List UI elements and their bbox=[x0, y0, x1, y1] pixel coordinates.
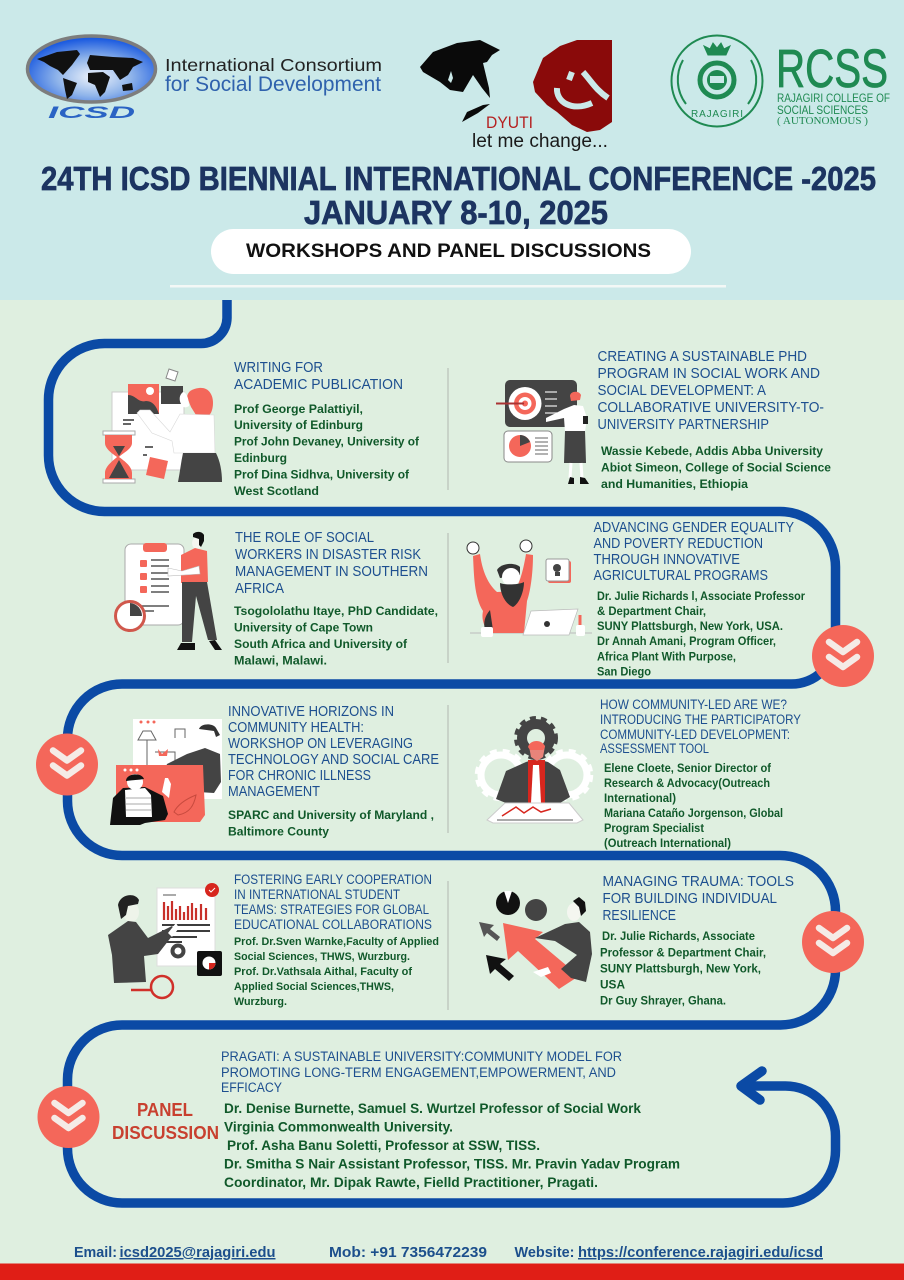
chevron badge 2 bbox=[36, 734, 98, 796]
heading: IN INTERNATIONAL STUDENT bbox=[234, 887, 400, 902]
panel: advancing gender equality bbox=[467, 520, 805, 678]
illustration: woman presenting target bbox=[496, 380, 589, 484]
speakers: Prof. Dr.Vathsala Aithal, Faculty of bbox=[234, 966, 412, 978]
heading: WRITING FOR bbox=[234, 360, 323, 376]
subtitle pill: WORKSHOPS AND PANEL DISCUSSIONS bbox=[246, 241, 651, 262]
Dyuti text: DYUTI bbox=[486, 113, 533, 132]
speakers: Applied Social Sciences,THWS, bbox=[234, 981, 394, 993]
panel: role of social workers in disaster risk bbox=[116, 530, 438, 668]
RCSS name: RAJAGIRI COLLEGE OF bbox=[777, 93, 890, 105]
panel: creating a sustainable PhD program bbox=[496, 349, 831, 491]
speakers bbox=[234, 402, 420, 498]
footer contact line: Website: bbox=[514, 1245, 574, 1261]
panel: panel discussion label: DISCUSSION bbox=[112, 1123, 219, 1143]
consortium name bbox=[165, 55, 382, 96]
tagline: let me change... bbox=[472, 131, 608, 152]
speakers: & Department Chair, bbox=[597, 604, 706, 618]
footer contact line: https://conference.rajagiri.edu/icsd bbox=[578, 1245, 823, 1261]
heading bbox=[235, 530, 428, 597]
heading: AFRICA bbox=[235, 581, 284, 597]
speakers: International) bbox=[604, 791, 676, 805]
speakers: Prof Dina Sidhva, University of bbox=[234, 468, 410, 482]
speakers: Research & Advocacy(Outreach bbox=[604, 776, 770, 790]
logo: ICSD bbox=[28, 36, 156, 122]
speakers bbox=[597, 589, 805, 678]
illustration: woman arranging pictures bbox=[103, 369, 222, 483]
heading: WORKSHOP ON LEVERAGING bbox=[228, 736, 413, 752]
speakers: Dr. Denise Burnette, Samuel S. Wurtzel Professor of Social Work bbox=[224, 1101, 641, 1116]
speakers: SUNY Plattsburgh, New York, bbox=[600, 962, 761, 976]
speakers: Wassie Kebede, Addis Abba University bbox=[601, 444, 823, 458]
illustration: man with chart and magnifier bbox=[108, 883, 222, 998]
heading: TEAMS: STRATEGIES FOR GLOBAL bbox=[234, 902, 429, 917]
panel: innovative horizons in community health bbox=[110, 704, 439, 838]
chevron badge 3 bbox=[802, 911, 864, 973]
heading: TECHNOLOGY AND SOCIAL CARE bbox=[228, 752, 439, 768]
panel: panel discussion label: PANEL bbox=[137, 1100, 193, 1120]
panel: fostering early cooperation bbox=[108, 872, 439, 1008]
chevron badge 1 bbox=[812, 625, 874, 687]
speakers: Tsogololathu Itaye, PhD Candidate, bbox=[234, 604, 438, 618]
speakers bbox=[601, 444, 831, 491]
illustration: man with gears bbox=[476, 718, 592, 823]
heading bbox=[221, 1049, 622, 1095]
speakers: Dr. Julie Richards l, Associate Professor bbox=[597, 589, 805, 603]
heading: AND POVERTY REDUCTION bbox=[594, 536, 763, 552]
heading: COMMUNITY-LED DEVELOPMENT: bbox=[600, 727, 790, 742]
speakers: South Africa and University of bbox=[234, 637, 408, 651]
RCSS name: SOCIAL SCIENCES bbox=[777, 105, 868, 117]
speakers: Dr. Smitha S Nair Assistant Professor, TISS. Mr. Pravin Yadav Program bbox=[224, 1156, 680, 1172]
logo: Dyuti bbox=[420, 40, 612, 152]
speakers: Social Sciences, THWS, Wurzburg. bbox=[234, 951, 410, 963]
heading bbox=[600, 697, 801, 756]
heading bbox=[234, 872, 432, 932]
header band bbox=[0, 0, 904, 300]
speakers: Edinburg bbox=[234, 451, 287, 465]
speakers bbox=[228, 808, 434, 838]
speakers: Prof George Palattiyil, bbox=[234, 402, 363, 416]
speakers: Africa Plant With Purpose, bbox=[597, 650, 736, 664]
speakers: Abiot Simeon, College of Social Science bbox=[601, 460, 831, 474]
heading: WORKERS IN DISASTER RISK bbox=[235, 547, 421, 563]
speakers: Dr. Julie Richards, Associate bbox=[602, 929, 755, 943]
speakers: West Scotland bbox=[234, 484, 319, 498]
heading: ADVANCING GENDER EQUALITY bbox=[594, 520, 794, 536]
heading: MANAGEMENT bbox=[228, 784, 320, 800]
heading: SOCIAL DEVELOPMENT: A bbox=[598, 383, 766, 399]
footer contact line bbox=[74, 1245, 823, 1261]
speakers: Program Specialist bbox=[604, 821, 704, 835]
heading: MANAGEMENT IN SOUTHERN bbox=[235, 564, 428, 580]
speakers: University of Edinburg bbox=[234, 418, 363, 432]
footer contact line: icsd2025@rajagiri.edu bbox=[120, 1245, 276, 1261]
speakers: Wurzburg. bbox=[234, 996, 287, 1008]
heading: FOR BUILDING INDIVIDUAL bbox=[602, 891, 777, 907]
heading: INNOVATIVE HORIZONS IN bbox=[228, 704, 394, 720]
speakers: University of Cape Town bbox=[234, 620, 373, 634]
speakers bbox=[604, 761, 783, 850]
heading: PRAGATI: A SUSTAINABLE UNIVERSITY:COMMUNITY MODEL FOR bbox=[221, 1049, 622, 1064]
panel: how community-led are we bbox=[476, 697, 801, 850]
subtitle pill bbox=[211, 229, 691, 274]
speakers bbox=[234, 604, 438, 668]
heading: MANAGING TRAUMA: TOOLS bbox=[602, 874, 794, 890]
illustration: man with checklist and clock bbox=[116, 532, 222, 650]
heading: THROUGH INNOVATIVE bbox=[594, 552, 740, 568]
chevron badge 4 bbox=[38, 1086, 100, 1148]
speakers: Dr Guy Shrayer, Ghana. bbox=[600, 994, 726, 1008]
RCSS name: ( AUTONOMOUS ) bbox=[777, 116, 868, 127]
footer red bar bbox=[0, 1264, 904, 1280]
speakers bbox=[224, 1101, 680, 1190]
speakers: San Diego bbox=[597, 664, 651, 678]
heading: FOR CHRONIC ILLNESS bbox=[228, 768, 371, 784]
heading: HOW COMMUNITY-LED ARE WE? bbox=[600, 697, 787, 712]
heading: COLLABORATIVE UNIVERSITY-TO- bbox=[598, 400, 824, 416]
consortium name: for Social Development bbox=[165, 73, 381, 96]
footer contact line: Email: bbox=[74, 1245, 117, 1261]
speakers bbox=[234, 936, 439, 1008]
heading bbox=[602, 874, 794, 924]
illustration: video call bbox=[110, 719, 222, 825]
heading: ASSESSMENT TOOL bbox=[600, 741, 709, 756]
heading bbox=[594, 520, 794, 584]
heading: EFFICACY bbox=[221, 1080, 282, 1095]
logo: Rajagiri seal bbox=[672, 36, 762, 126]
speakers: Malawi, Malawi. bbox=[234, 654, 327, 668]
speakers: USA bbox=[600, 978, 625, 992]
title bbox=[41, 160, 876, 231]
heading: RESILIENCE bbox=[602, 908, 676, 924]
speakers: Mariana Cataño Jorgenson, Global bbox=[604, 806, 783, 820]
speakers bbox=[600, 929, 766, 1008]
panel: managing trauma bbox=[479, 874, 794, 1008]
footer contact line: Mob: +91 7356472239 bbox=[329, 1245, 487, 1261]
speakers: SPARC and University of Maryland , bbox=[228, 808, 434, 822]
heading: INTRODUCING THE PARTICIPATORY bbox=[600, 712, 801, 727]
heading bbox=[228, 704, 439, 800]
speakers: Coordinator, Mr. Dipak Rawte, Fielld Practitioner, Pragati. bbox=[224, 1175, 598, 1190]
dividers bbox=[447, 368, 449, 1010]
heading: CREATING A SUSTAINABLE PHD bbox=[598, 349, 807, 365]
speakers: Prof. Asha Banu Soletti, Professor at SSW, TISS. bbox=[227, 1138, 540, 1153]
panel: panel discussion label bbox=[112, 1100, 219, 1143]
speakers: and Humanities, Ethiopia bbox=[601, 477, 748, 491]
speakers: Prof John Devaney, University of bbox=[234, 434, 420, 448]
heading: PROGRAM IN SOCIAL WORK AND bbox=[598, 366, 820, 382]
title: JANUARY 8-10, 2025 bbox=[304, 194, 608, 231]
ICSD wordmark: ICSD bbox=[48, 103, 135, 122]
arrow head bbox=[741, 1071, 762, 1100]
heading bbox=[598, 349, 824, 433]
speakers: Dr Annah Amani, Program Officer, bbox=[597, 634, 776, 648]
heading bbox=[234, 360, 403, 393]
heading: EDUCATIONAL COLLABORATIONS bbox=[234, 917, 432, 932]
heading: COMMUNITY HEALTH: bbox=[228, 720, 364, 736]
speakers: Professor & Department Chair, bbox=[600, 946, 766, 960]
speakers: Baltimore County bbox=[228, 824, 329, 838]
winding route line bbox=[48, 300, 835, 1203]
speakers: Virginia Commonwealth University. bbox=[224, 1120, 453, 1134]
logo: Rajagiri seal: RAJAGIRI bbox=[691, 109, 743, 120]
heading: ACADEMIC PUBLICATION bbox=[234, 377, 403, 393]
panel: Pragati bbox=[221, 1049, 680, 1190]
heading: UNIVERSITY PARTNERSHIP bbox=[598, 417, 769, 433]
RCSS name bbox=[776, 39, 890, 127]
speakers: Prof. Dr.Sven Warnke,Faculty of Applied bbox=[234, 936, 439, 948]
heading: FOSTERING EARLY COOPERATION bbox=[234, 872, 432, 887]
illustration: man lifting red arrow bbox=[479, 891, 592, 989]
heading: PROMOTING LONG-TERM ENGAGEMENT,EMPOWERMENT, AND bbox=[221, 1065, 616, 1080]
illustration: bearded man celebrating at laptop bbox=[467, 540, 592, 637]
speakers: SUNY Plattsburgh, New York, USA. bbox=[597, 619, 783, 633]
heading: AGRICULTURAL PROGRAMS bbox=[594, 568, 768, 584]
consortium name: International Consortium bbox=[165, 55, 382, 75]
speakers: Elene Cloete, Senior Director of bbox=[604, 761, 772, 775]
heading: THE ROLE OF SOCIAL bbox=[235, 530, 374, 546]
speakers: (Outreach International) bbox=[604, 836, 731, 850]
panel: writing for academic publication bbox=[103, 360, 420, 498]
